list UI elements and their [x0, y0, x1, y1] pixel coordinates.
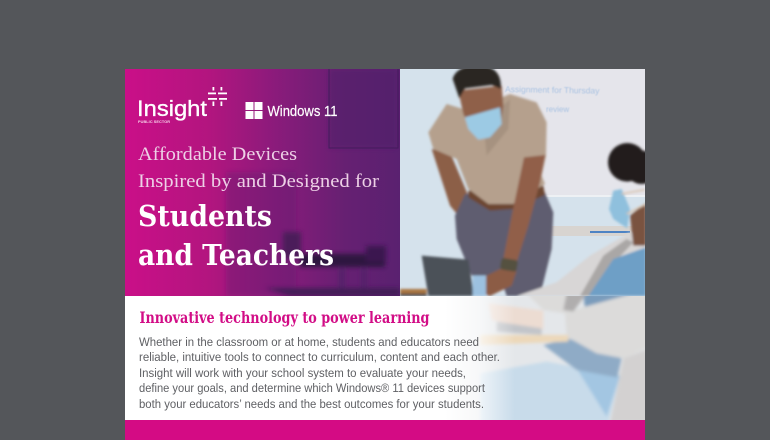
face — [458, 84, 504, 118]
hoodie sleeve — [527, 293, 650, 358]
mask strap — [622, 190, 646, 214]
body paragraph: define your goals, and determine which Windows® 11 devices support — [139, 381, 486, 395]
teacher arm right — [503, 155, 545, 262]
panel: photo of teacher and student — [400, 66, 658, 296]
laptop edge — [497, 322, 542, 335]
body paragraph — [139, 335, 500, 411]
student hair — [608, 143, 647, 182]
body paragraph: reliable, intuitive tools to connect to curriculum, content and each other. — [139, 350, 500, 364]
section heading: Innovative technology to power learning — [140, 308, 430, 327]
whiteboard writing: review — [546, 105, 569, 114]
blue shirt top — [582, 296, 630, 308]
dark shirt fold — [543, 338, 622, 377]
logo: Insight: PUBLIC SECTOR — [138, 120, 170, 124]
footer band — [125, 420, 645, 440]
whiteboard frame outline — [329, 66, 398, 148]
hoodie body — [610, 350, 645, 420]
student hoodie — [517, 232, 646, 296]
body paragraph: Whether in the classroom or at home, students and educators need — [139, 335, 479, 349]
hand — [484, 268, 517, 296]
logo: Windows 11: Windows 11 — [268, 103, 338, 120]
whiteboard — [495, 69, 645, 195]
teacher arm left — [432, 149, 468, 216]
panel: text section — [125, 293, 650, 423]
Windows icon — [246, 102, 262, 119]
infographic page — [125, 69, 645, 440]
whiteboard writing: Assignment for Thursday — [505, 84, 600, 96]
hand — [488, 303, 543, 329]
logo mark — [208, 87, 227, 106]
tray — [480, 335, 568, 345]
faded lower photo — [478, 296, 645, 420]
heading main — [139, 204, 333, 266]
logo: Windows 11 — [246, 102, 338, 120]
background room shapes — [226, 69, 400, 296]
heading intro: Affordable Devices — [138, 144, 297, 165]
shirt — [428, 94, 547, 204]
jeans — [480, 362, 620, 423]
panel: magenta hero — [125, 66, 400, 296]
student mask — [609, 189, 630, 228]
student neck — [630, 202, 646, 246]
laptop — [422, 256, 474, 296]
logo: Insight: Insight — [137, 96, 208, 121]
trousers — [455, 189, 553, 296]
body paragraph: both your educators’ needs and the best outcomes for your students. — [139, 397, 484, 411]
mask — [465, 107, 502, 140]
heading intro — [138, 144, 380, 192]
watch — [500, 258, 518, 272]
hair — [453, 66, 501, 98]
whiteboard writing — [504, 86, 600, 112]
body paragraph: Insight will work with your school system to evaluate your needs, — [139, 366, 466, 380]
heading intro: Inspired by and Designed for — [138, 171, 380, 192]
belt — [468, 186, 545, 211]
heading main: Students — [138, 199, 272, 233]
heading main: and Teachers — [138, 238, 334, 272]
logo: Insight — [137, 87, 227, 124]
